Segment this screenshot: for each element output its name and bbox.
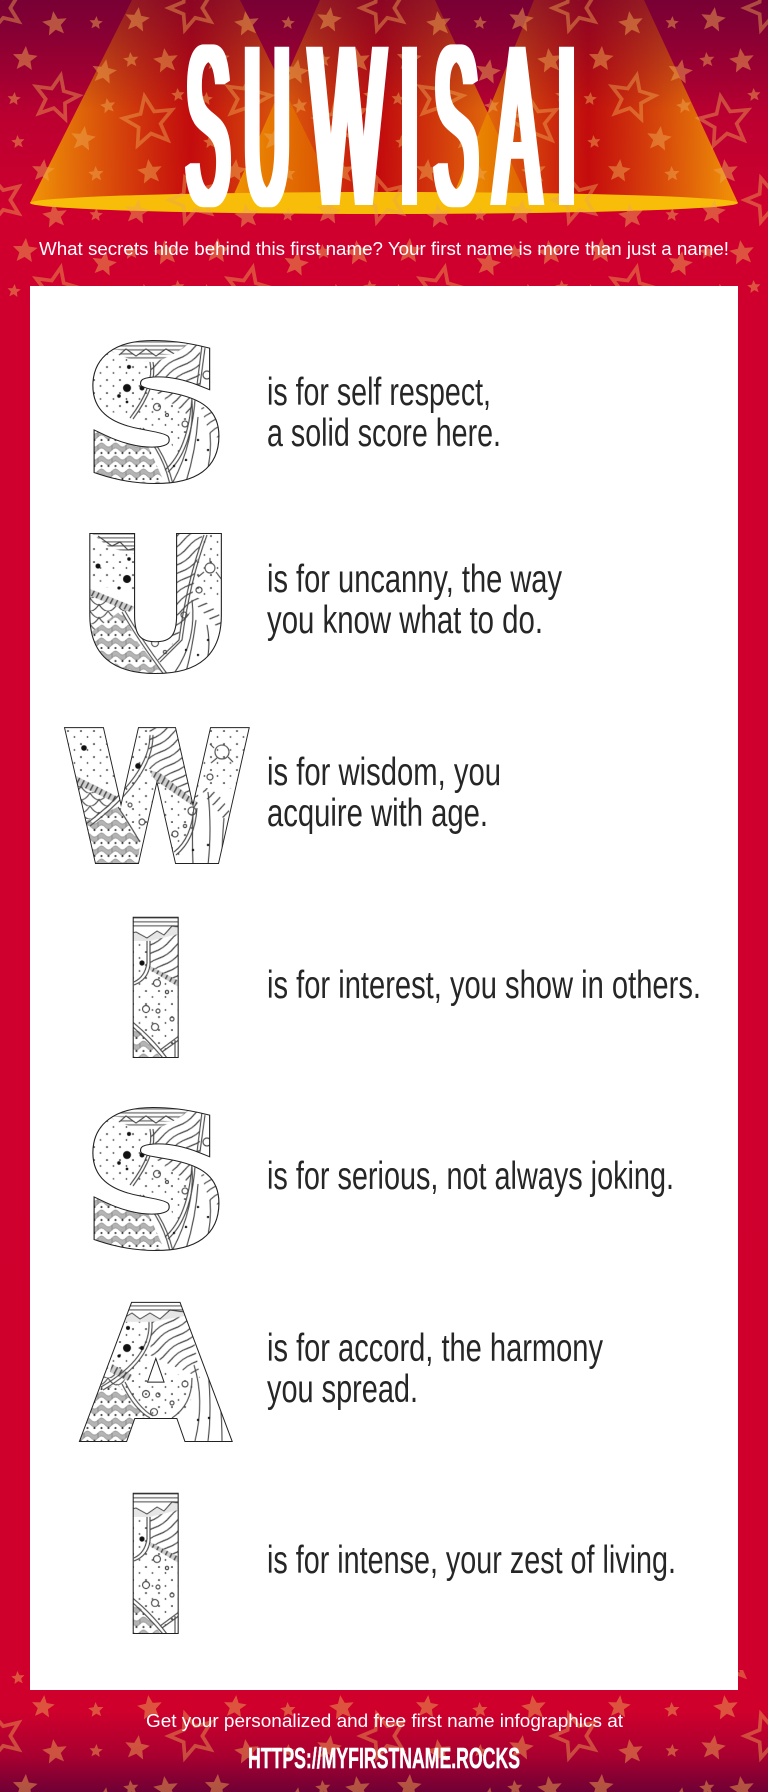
row A: text: you spread. [267,1368,418,1411]
row A: letter icon: A [88,1274,224,1476]
title: I [400,0,418,254]
row A: text [267,1327,604,1411]
spotlights [0,0,768,214]
row S2: letter icon: S [86,1082,226,1283]
row S2: letter icon: S [86,1082,226,1283]
row S: text [267,371,501,455]
title: S [186,0,230,254]
row I2: letter icon: I [121,1463,191,1672]
row A: text: is for accord, the harmony [267,1327,604,1370]
row W: letter icon: W [65,698,249,901]
row S: text: is for self respect, [267,371,491,414]
row W: text: is for wisdom, you [267,751,501,794]
row U: letter icon: U [76,502,236,710]
panel: white content [30,286,738,1690]
row S: letter icon: S [86,315,226,516]
row I: letter icon: I [121,887,191,1096]
row U: text: is for uncanny, the way [267,558,563,601]
row A: letter icon: A [88,1274,224,1476]
text: I [558,0,576,254]
footer url: HTTPS://MYFIRSTNAME.ROCKS [248,1743,520,1775]
row U: text [267,558,563,642]
row U: text: you know what to do. [267,599,543,642]
row W: letter icon: W [65,698,249,901]
row W: text: acquire with age. [267,792,488,835]
footer text: Get your personalized and free first name infographics at [146,1710,623,1731]
title: A [494,0,540,254]
star pattern: top [0,0,768,298]
title: U [244,0,290,254]
row S: text: a solid score here. [267,412,501,455]
row U: letter icon: U [76,502,236,710]
subtitle: What secrets hide behind this first name? Your first name is more than just a name! [39,238,729,259]
row S: letter icon: S [86,315,226,516]
title: S [434,0,478,254]
row W: text [267,751,501,835]
row I2: letter icon: I [121,1463,191,1672]
title: W [310,0,384,254]
star pattern: bottom [0,1670,768,1792]
row I: letter icon: I [121,887,191,1096]
